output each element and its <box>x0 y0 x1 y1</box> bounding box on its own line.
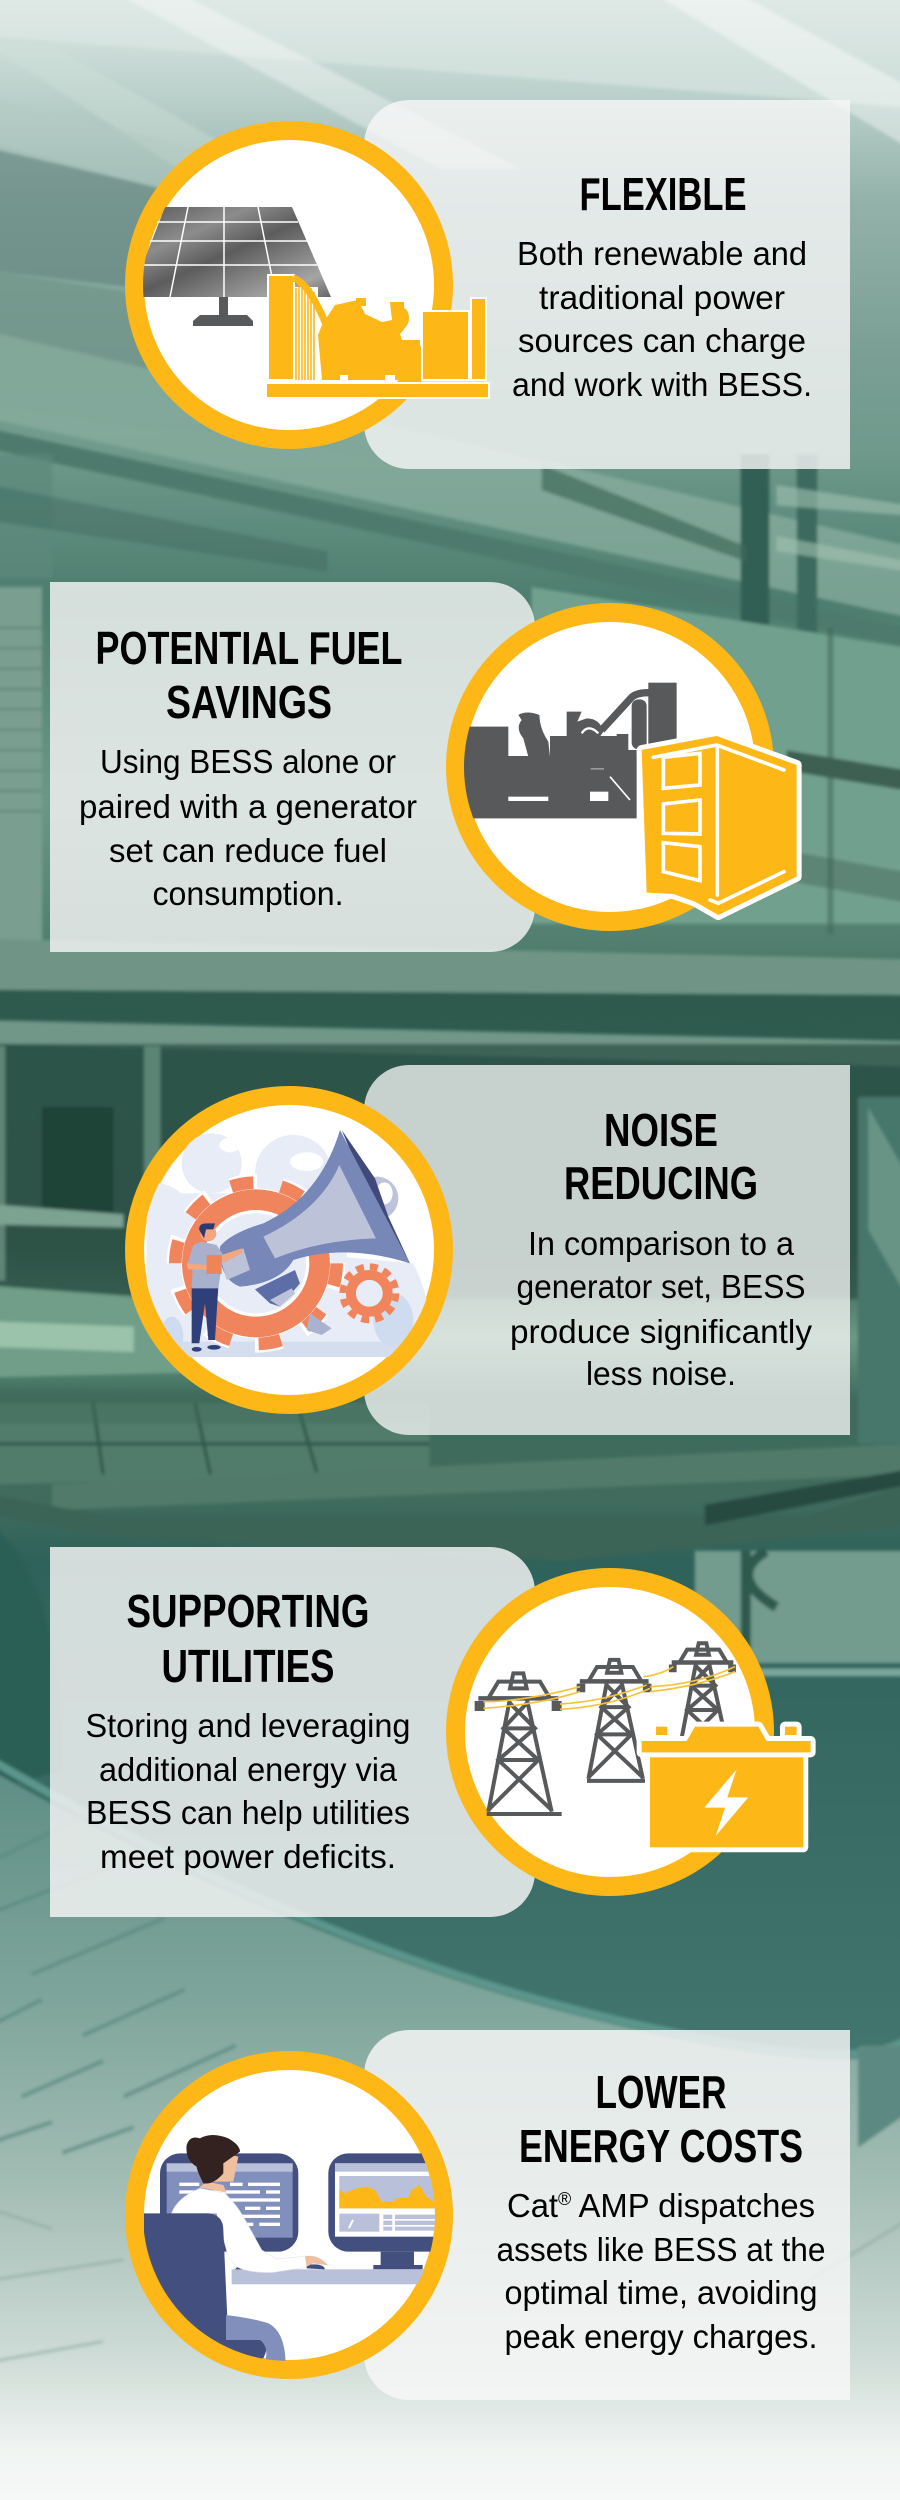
yellow ring circle <box>134 130 444 440</box>
body text: and work with BESS. <box>512 366 812 403</box>
body text: AMP dispatches <box>571 2187 815 2224</box>
body text: Storing and leveraging <box>86 1707 410 1744</box>
body text: Cat <box>507 2187 558 2224</box>
body text: Both renewable and <box>517 235 807 272</box>
yellow ring circle <box>134 1096 444 1404</box>
icon: solar panel <box>130 207 331 326</box>
body text: set can reduce fuel <box>109 832 387 869</box>
right monitor <box>328 2153 435 2270</box>
heading: SUPPORTING <box>126 1585 370 1637</box>
text card <box>364 100 850 469</box>
section: flexible <box>130 100 850 469</box>
body text <box>496 2187 826 2355</box>
heading <box>519 2066 803 2172</box>
body text <box>79 743 417 912</box>
body text <box>510 1225 813 1392</box>
body text: sources can charge <box>518 322 806 359</box>
heading <box>564 1104 758 1209</box>
yellow ring circle <box>456 612 764 922</box>
heading: SAVINGS <box>166 676 332 728</box>
body text: ® <box>558 2189 571 2209</box>
text card <box>364 2030 850 2400</box>
section: noise reducing <box>134 1065 850 1435</box>
section: lower energy costs <box>134 2030 850 2400</box>
text card <box>364 1065 850 1435</box>
megaphone <box>374 1176 398 1216</box>
body text: additional energy via <box>99 1751 398 1788</box>
body text: meet power deficits. <box>100 1838 396 1875</box>
desk <box>232 2269 438 2284</box>
section: supporting utilities <box>50 1547 811 1917</box>
person <box>235 2267 242 2270</box>
body text: traditional power <box>539 279 785 316</box>
body text: paired with a generator <box>79 788 417 825</box>
body text: BESS can help utilities <box>86 1794 410 1831</box>
body text <box>512 235 812 403</box>
body text: Using BESS alone or <box>100 743 396 780</box>
heading: REDUCING <box>564 1157 758 1209</box>
heading: POTENTIAL FUEL <box>96 622 402 674</box>
icon: operator at monitors <box>144 2135 435 2361</box>
yellow ring circle <box>456 1578 764 1886</box>
body text: consumption. <box>152 875 344 912</box>
heading <box>126 1585 370 1692</box>
text card <box>50 1547 535 1917</box>
body text: assets like BESS at the <box>496 2231 826 2268</box>
body text: produce significantly <box>510 1313 813 1350</box>
icon: generator silhouette <box>450 683 677 818</box>
heading: FLEXIBLE <box>580 168 746 220</box>
heading: NOISE <box>604 1104 718 1156</box>
body text: In comparison to a <box>528 1225 795 1262</box>
person <box>192 1287 218 1343</box>
section: potential fuel savings <box>50 582 797 952</box>
text card <box>50 582 535 952</box>
left monitor <box>160 2153 298 2252</box>
icon: battery cabinet <box>642 736 797 915</box>
icon: battery <box>642 1727 811 1847</box>
heading: LOWER <box>596 2066 726 2118</box>
yellow ring circle <box>134 2060 444 2370</box>
heading: UTILITIES <box>162 1640 334 1692</box>
small gear <box>343 1267 396 1320</box>
chair <box>144 2213 267 2363</box>
body text: less noise. <box>586 1355 736 1392</box>
icon: generator set <box>266 275 489 398</box>
body text: peak energy charges. <box>504 2318 818 2355</box>
icon: transmission towers <box>475 1643 736 1814</box>
light background blobs <box>147 1133 433 1357</box>
large gear <box>174 1182 338 1345</box>
icon: megaphone with gears and person <box>147 1130 433 1357</box>
heading <box>96 622 402 728</box>
body text <box>86 1707 410 1875</box>
heading: ENERGY COSTS <box>519 2120 803 2172</box>
body text: optimal time, avoiding <box>504 2274 818 2311</box>
body text: generator set, BESS <box>516 1268 806 1305</box>
